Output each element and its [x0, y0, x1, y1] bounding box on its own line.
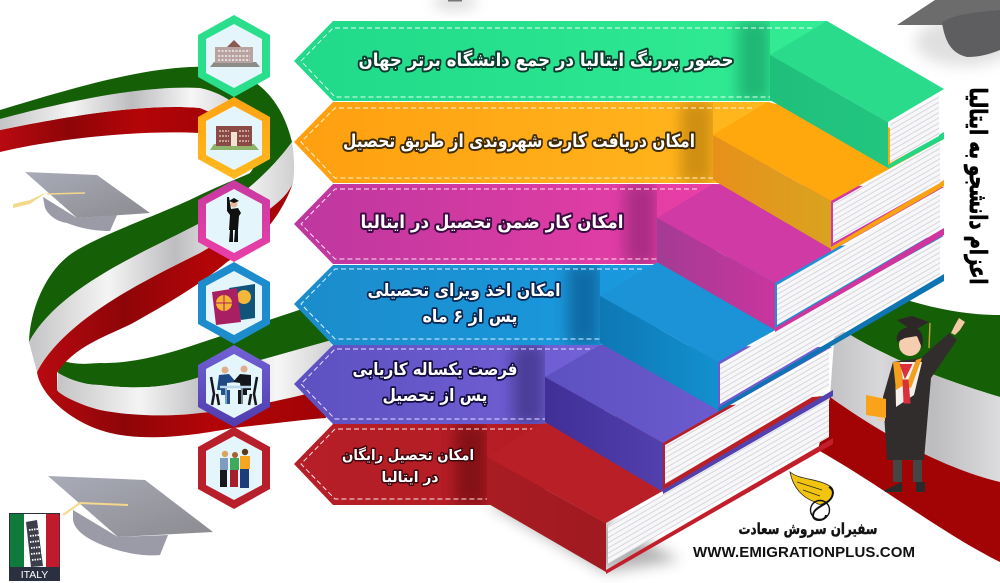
banner 3: magenta: [294, 184, 716, 264]
banner 1: green: [294, 21, 827, 101]
banner 1: green: حضور پررنگ ایتالیا در جمع دانشگاه برتر جهان: [358, 49, 734, 71]
hexagon 2: brown building: [198, 97, 270, 179]
book: green: [770, 21, 944, 169]
logo: company name: سفیران سروش سعادت: [738, 520, 878, 538]
book: orange: [713, 102, 944, 251]
banner 5: violet: پس از تحصیل: [382, 386, 488, 406]
hexagon 4: passports: [198, 262, 270, 344]
graduation cap: lower left: [48, 476, 213, 555]
hexagon 1: university building: [198, 15, 270, 97]
hexagon 3: graduate figure: [198, 180, 270, 262]
banner 4: blue: [294, 265, 660, 345]
graduate character: [866, 316, 965, 492]
logo: swan wing: [790, 472, 833, 520]
graduation cap: top right: [897, 0, 1000, 66]
banner 2: orange: [294, 102, 770, 183]
book: violet: [545, 345, 833, 494]
banner 6: red: امکان تحصیل رایگان: [342, 446, 474, 464]
banner 4: blue: امکان اخذ ویزای تحصیلی: [368, 281, 560, 301]
hexagon 5: meeting at table: [198, 345, 270, 427]
banner 2: orange: امکان دریافت کارت شهروندی از طریق تحصیل: [343, 131, 695, 152]
title: vertical: اعزام دانشجو به ایتالیا: [964, 88, 992, 284]
banner 6: red: [294, 424, 545, 505]
book: red: [487, 395, 833, 574]
italy badge: ITALY: [21, 569, 48, 581]
ribbon: Italian flag right: [818, 300, 1000, 562]
italy badge: [9, 513, 60, 581]
banner 3: magenta: امکان کار ضمن تحصیل در ایتالیا: [360, 212, 624, 233]
graduation cap: upper left: [13, 172, 150, 231]
book: blue: [600, 236, 944, 412]
banner 4: blue: پس از ۶ ماه: [422, 307, 518, 327]
banner 5: violet: فرصت یکساله کاریابی: [352, 360, 518, 380]
ribbon: Italian flag left: [0, 67, 332, 437]
book: magenta: [657, 184, 944, 332]
website url: WWW.EMIGRATIONPLUS.COM: [693, 544, 915, 561]
banner 6: red: در ایتالیا: [382, 470, 438, 486]
hexagon 6: three students: [198, 427, 270, 509]
graduation cap sliver: top centre: [433, 0, 477, 10]
banner 5: violet: [294, 345, 605, 424]
